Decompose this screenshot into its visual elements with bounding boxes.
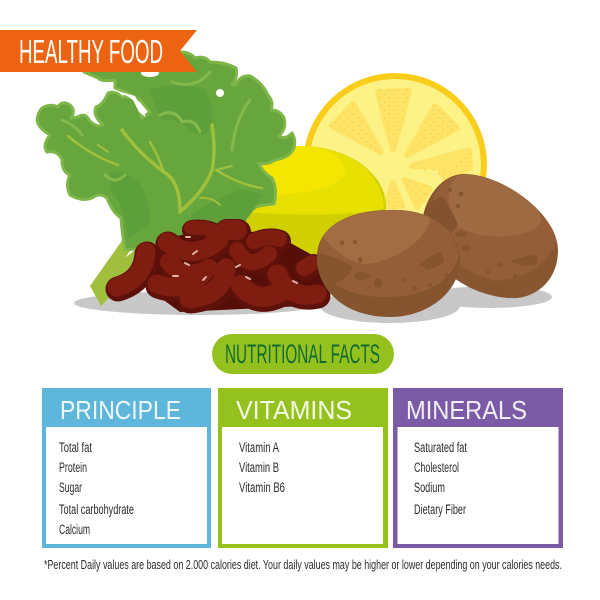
beans base mass xyxy=(150,225,325,312)
list: minerals items: Saturated fat xyxy=(414,440,467,455)
list: principle items: Calcium xyxy=(59,522,90,537)
list: minerals items: Cholesterol xyxy=(414,460,459,475)
list: vitamins items: Vitamin B6 xyxy=(239,480,285,495)
kale stems xyxy=(90,207,185,306)
kale pale edge xyxy=(62,72,250,180)
heading pill: nutritional facts: NUTRITIONAL FACTS xyxy=(225,339,380,369)
panel: vitamins xyxy=(218,388,388,548)
ground shadow xyxy=(74,286,552,323)
list: principle items: Total carbohydrate xyxy=(59,502,134,517)
panel: principle xyxy=(42,388,211,548)
panel heading: vitamins: VITAMINS xyxy=(236,395,352,425)
list: minerals items: Dietary Fiber xyxy=(414,502,466,517)
kale veins xyxy=(68,125,262,212)
list: vitamins items: Vitamin A xyxy=(239,440,279,455)
illustration: food group xyxy=(37,52,558,323)
icon: kale leaf xyxy=(37,52,295,306)
icon: right potato xyxy=(420,174,558,299)
panel heading: minerals: MINERALS xyxy=(406,395,527,425)
icon: kidney beans xyxy=(117,225,325,312)
list: principle items: Total fat xyxy=(59,440,92,455)
panel: minerals xyxy=(393,388,563,548)
bean eyes xyxy=(173,237,297,283)
list: minerals items xyxy=(414,440,467,517)
list: principle items: Protein xyxy=(59,460,87,475)
list: principle items xyxy=(59,440,134,537)
kale darker folds xyxy=(110,85,262,238)
list: vitamins items xyxy=(239,440,285,495)
icon: citrus slice xyxy=(303,73,487,257)
beans lit layer xyxy=(117,228,317,299)
banner: healthy food xyxy=(0,30,197,72)
list: principle items: Sugar xyxy=(59,480,82,495)
banner: healthy food: HEALTHY FOOD xyxy=(19,33,163,70)
list: minerals items: Sodium xyxy=(414,480,445,495)
kale holes xyxy=(121,69,224,117)
beans shadow layer xyxy=(118,230,318,301)
list: vitamins items: Vitamin B xyxy=(239,460,279,475)
panel heading: principle: PRINCIPLE xyxy=(60,395,181,425)
icon: left potato xyxy=(316,210,460,319)
heading pill: nutritional facts xyxy=(212,334,394,374)
icon: whole lemon xyxy=(240,146,386,262)
